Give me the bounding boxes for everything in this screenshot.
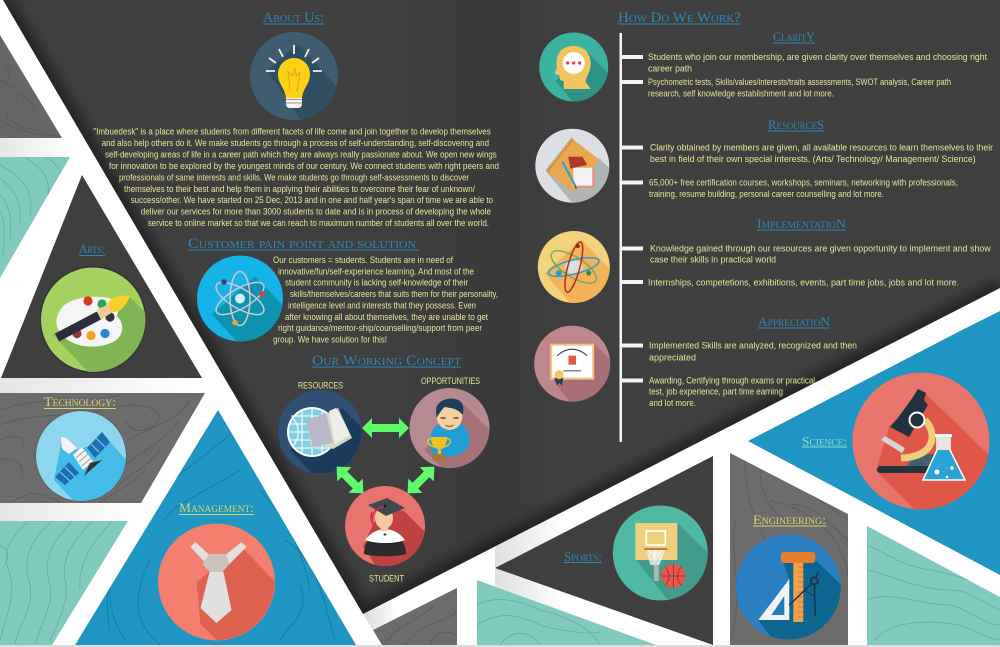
icon: globe and book xyxy=(278,390,364,476)
icon: boy with trophy xyxy=(410,388,492,470)
text: resources lines: 65,000+ free certification courses, workshops, seminars, networking with professionals, xyxy=(649,178,958,188)
text: implementation lines: case their skills in practical world xyxy=(650,254,776,266)
panel: teal bottom left xyxy=(0,518,130,647)
panel: gray triangle top left xyxy=(0,35,62,138)
diagram: working concept cycle xyxy=(278,376,492,584)
icon: head with speech xyxy=(539,32,610,103)
heading: Management: Management: xyxy=(179,500,254,515)
text block: about paragraph: deliver our services for more than 3000 students to date and is in process of developing the whole xyxy=(141,206,491,218)
label: student: STUDENT xyxy=(369,574,404,584)
text: appreciation lines: appreciated xyxy=(649,352,696,364)
panel: teal bottom centre xyxy=(475,578,660,647)
text: resources lines xyxy=(649,142,994,199)
panel: science xyxy=(745,305,1000,577)
heading: How Do We Work?: How Do We Work? xyxy=(618,10,741,26)
text block: customer paragraph: intelligence level and interests that they possess. Even xyxy=(288,300,476,312)
text block: customer paragraph: right guidance/mentor-ship/counselling/support from peer xyxy=(278,323,483,334)
text: appreciation lines: and lot more. xyxy=(649,398,696,408)
icon: paint palette xyxy=(40,266,146,373)
text block: customer paragraph: after knowing all about themselves, they are unable to get xyxy=(285,312,488,323)
text: clarity lines: career path xyxy=(648,64,692,74)
heading: Implementation: ImplementatioN xyxy=(757,216,847,231)
section: resources xyxy=(535,117,994,206)
text: clarity lines xyxy=(648,52,987,98)
panel: gray bottom centre xyxy=(373,588,457,645)
panel: teal triangle upper left xyxy=(0,157,70,278)
icon: microscope and flask xyxy=(852,372,991,511)
panel: management triangle xyxy=(70,405,360,647)
text: implementation lines: Internships, competetions, exhibitions, events, part time jobs, jobs and lot more. xyxy=(648,278,959,288)
heading: Arts: Arts: xyxy=(79,241,105,256)
text: appreciation lines: Awarding, Certifying through exams or practical xyxy=(649,376,815,386)
panel: engineering xyxy=(728,450,850,647)
text block: about paragraph: service to online market so that we can reach to maximum number of students all over the world. xyxy=(148,218,489,229)
text block: about paragraph: for innovation to be explored by the youngest minds of our century. We connect students with right peers and xyxy=(109,161,499,172)
section: clarity xyxy=(539,29,987,103)
text block: customer paragraph: Our customers = students. Students are in need of xyxy=(273,255,453,266)
text: appreciation lines: Implemented Skills are analyzed, recognized and then xyxy=(649,340,857,352)
section: appreciation xyxy=(534,314,857,408)
icon: atom blue xyxy=(197,256,284,342)
panel: teal bottom right xyxy=(865,524,1000,647)
text block: about paragraph: self-developing areas of life in a career path which they are always really passionate about. We open new wings xyxy=(105,150,497,160)
icon: satellite xyxy=(36,410,127,506)
icon: necktie xyxy=(158,524,276,647)
text: implementation lines xyxy=(648,244,991,288)
heading: Appreciation: AppreciatioN xyxy=(758,314,831,329)
icon: light bulb xyxy=(250,32,338,120)
text block: customer paragraph: student community is lacking self-knowledge of their xyxy=(285,278,469,288)
heading: Engineering: Engineering: xyxy=(753,512,826,527)
panel: arts triangle xyxy=(1,175,202,380)
text block: about paragraph: themselves to their best and help them in applying their abilities to overcome their fear of unknown/ xyxy=(124,184,475,195)
timeline: vertical line and ticks xyxy=(620,33,643,442)
heading: Clarity: ClaritY xyxy=(773,29,816,44)
heading: Resources: ResourceS xyxy=(768,117,824,132)
text: clarity lines: research, self knowledge establishment and lot more. xyxy=(648,88,834,98)
text block: customer paragraph: group. We have solution for this! xyxy=(273,334,387,346)
heading: Customer pain point and solution: Customer pain point and solution xyxy=(188,236,416,252)
arrow: resources to student xyxy=(329,459,371,501)
arrow: opportunities to student xyxy=(400,459,442,501)
text: appreciation lines xyxy=(649,340,857,408)
light fold bands on the white strips xyxy=(0,138,565,630)
label: opportunities: OPPORTUNITIES xyxy=(421,376,480,387)
panel: sports triangle xyxy=(495,456,713,645)
bottom edge line xyxy=(0,645,1000,647)
section: implementation xyxy=(538,216,991,305)
icon: notebook xyxy=(535,129,612,206)
text block: customer paragraph: skills/themselves/careers that suits them for their personality, xyxy=(290,289,498,300)
text: appreciation lines: test, job experience, part time earning xyxy=(649,386,783,396)
text block: about paragraph xyxy=(93,126,499,229)
icon: ruler and compass xyxy=(736,534,843,647)
label: resources: RESOURCES xyxy=(298,380,343,392)
text block: about paragraph: "Imbuedesk" is a place where students from different facets of life come and join together to develop themselves xyxy=(93,126,491,138)
icon: basketball hoop xyxy=(613,506,708,603)
text: resources lines: best in field of their own special interests. (Arts/ Technology/ Management/ Science) xyxy=(650,154,976,165)
icon: certificate xyxy=(534,326,612,404)
heading: About Us: About Us: xyxy=(263,10,324,26)
icon: atom yellow xyxy=(538,231,611,305)
heading: Technology: Technology: xyxy=(44,394,116,409)
icon: graduate xyxy=(345,486,427,568)
text block: customer paragraph: innovative/fun/self-experience learning. And most of the xyxy=(278,266,474,278)
text block: about paragraph: and also help others do it. We make students go through a process of self-understanding, self-discovering and xyxy=(102,138,489,149)
text block: about paragraph: professionals of same interests and skills. We make students go through self-assessments to discover xyxy=(119,172,470,184)
heading: Science: Science: xyxy=(802,434,847,448)
arrow: resources to opportunities xyxy=(362,418,409,438)
heading: Our Working Concept: Our Working Concept xyxy=(312,353,461,369)
text block: customer paragraph xyxy=(273,255,498,346)
panel: technology xyxy=(0,390,210,506)
text: resources lines: training, resume building, personal career counselling and lot more. xyxy=(649,189,884,199)
heading: Sports: Sports: xyxy=(564,549,602,564)
text block: about paragraph: success/other. We have started on 25 Dec, 2013 and in one and half year's span of time we are able to xyxy=(131,195,493,206)
